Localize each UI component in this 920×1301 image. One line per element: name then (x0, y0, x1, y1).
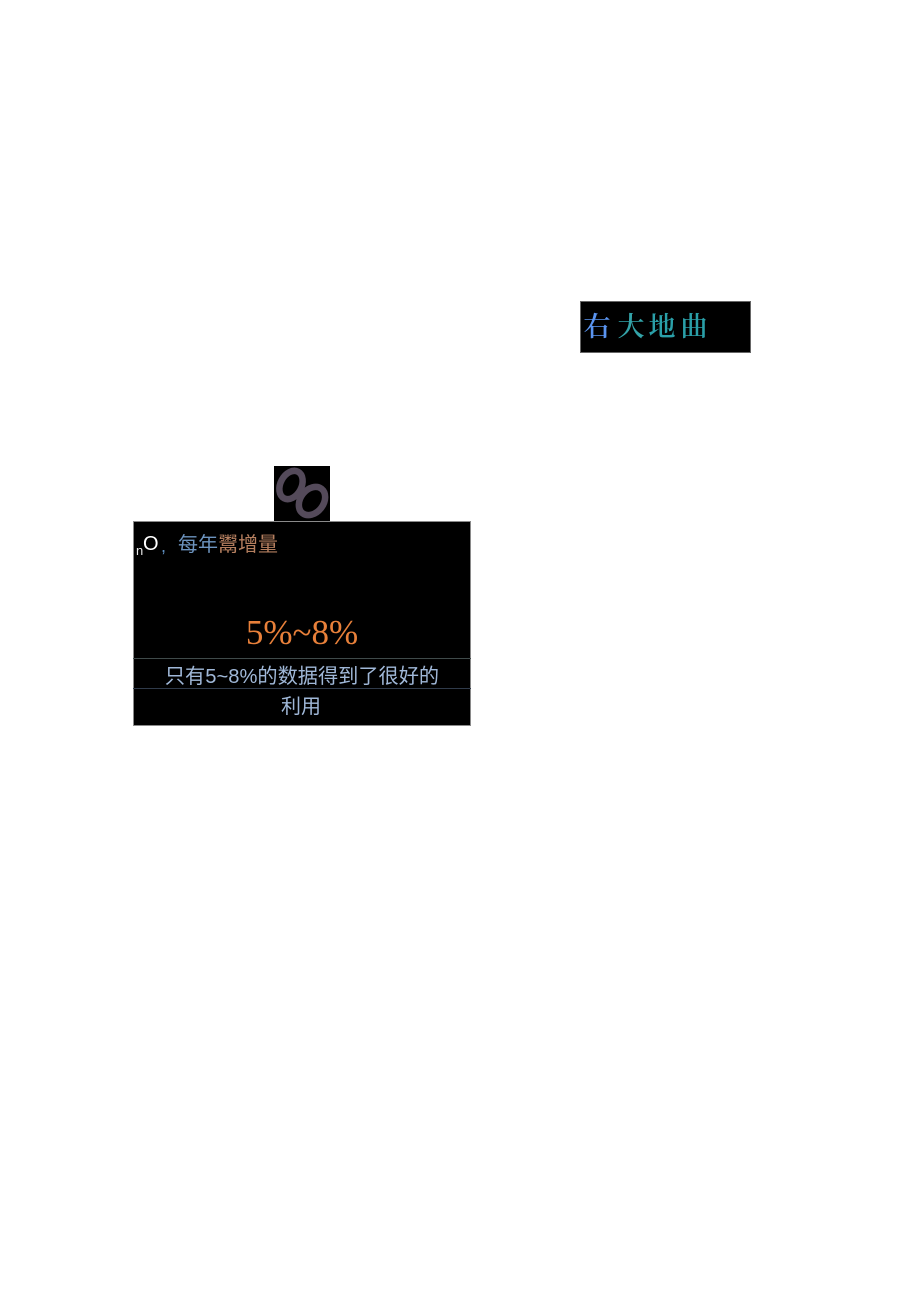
heading: annual growth: n (136, 543, 143, 558)
heading: annual growth: , (161, 536, 166, 556)
heading: gradient characters: 地 (648, 305, 676, 344)
heading: annual growth: 鬻增量 (218, 534, 278, 556)
panel: title tile (580, 301, 751, 353)
panel: data usage card (133, 521, 471, 726)
caption line one: 只有5~8%的数据得到了很好的 (165, 666, 439, 688)
heading: gradient characters: 曲 (680, 305, 708, 344)
heading: annual growth: 每年 (178, 534, 218, 556)
divider line top (133, 658, 471, 659)
heading: gradient characters: 右 (584, 305, 610, 344)
icon: figure-eight rings (274, 466, 330, 521)
heading: gradient characters (584, 305, 708, 344)
statistic: 5%~8%: 5%~8% (246, 613, 358, 652)
heading: gradient characters: 大 (618, 305, 644, 344)
heading: annual growth (136, 533, 278, 558)
caption line two: 利用 (281, 696, 321, 718)
divider line middle (133, 688, 471, 689)
heading: annual growth: O (143, 533, 159, 555)
